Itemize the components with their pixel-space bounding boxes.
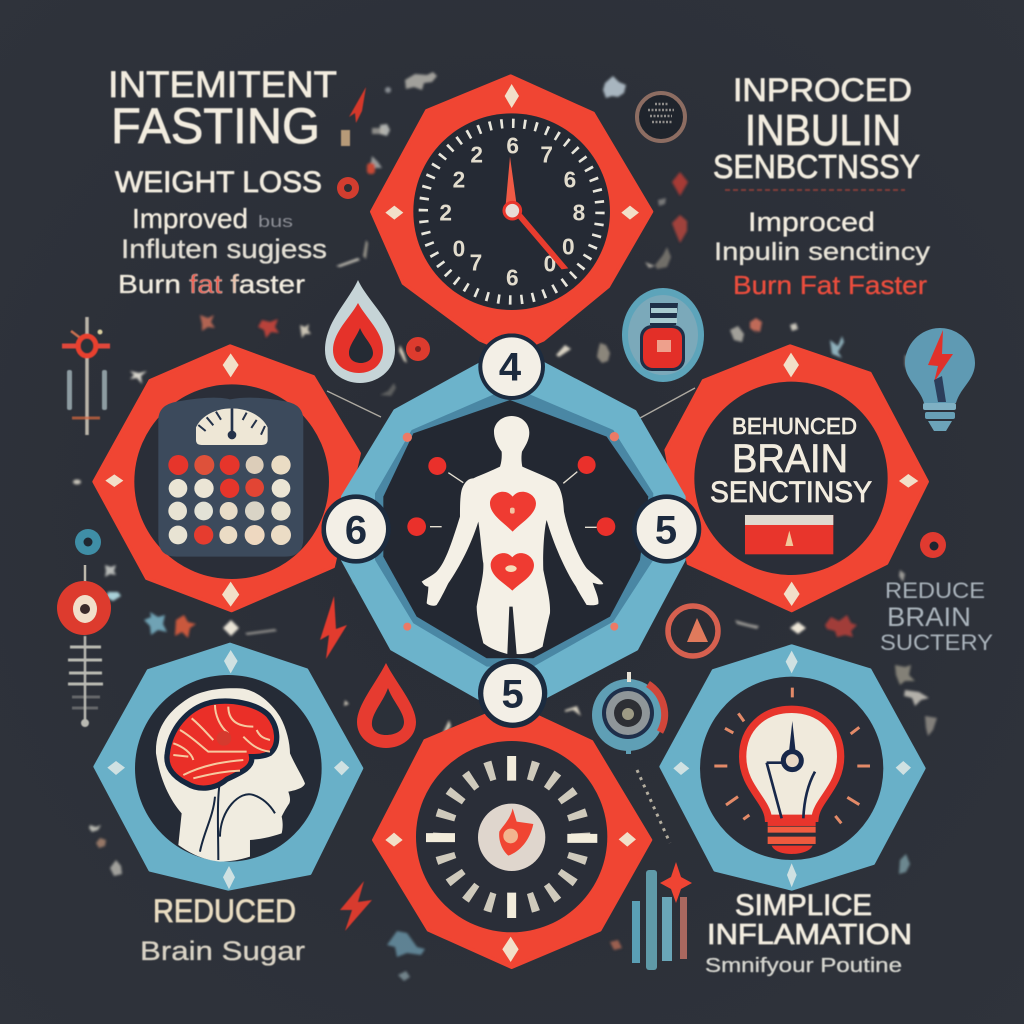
heading: brain sensitivity label: BRAIN bbox=[732, 437, 848, 481]
reduce brain text block: BRAIN bbox=[887, 602, 971, 632]
icon: horizontal scale lines bbox=[68, 636, 103, 726]
diamonds bbox=[107, 650, 349, 889]
ring inner band bbox=[375, 387, 653, 667]
heart lower bbox=[491, 553, 534, 591]
insulin sensitivity text block: INBULIN bbox=[745, 106, 901, 155]
icon: jar bbox=[622, 288, 704, 382]
decorative scattered particles bbox=[73, 72, 937, 981]
reduced brain sugar text block bbox=[140, 893, 305, 966]
badge bottom bbox=[478, 659, 547, 728]
title and weight loss text block bbox=[108, 64, 337, 299]
insulin sensitivity text block: SENBCTNSSY bbox=[713, 148, 920, 185]
heading: brain sensitivity label: SENCTINSY bbox=[710, 476, 872, 509]
title and weight loss text block: FASTING bbox=[111, 98, 320, 154]
calendar card bbox=[158, 398, 303, 557]
clock numerals: 8 bbox=[573, 200, 585, 226]
clock numerals: 2 bbox=[470, 142, 483, 168]
icon: red bolt center left bbox=[320, 596, 347, 659]
panel: clock bbox=[372, 76, 652, 353]
diamonds bbox=[385, 832, 636, 962]
brain bbox=[167, 701, 277, 788]
insulin sensitivity text block: Burn Fat Faster bbox=[733, 270, 927, 300]
body connector dots bbox=[407, 456, 615, 536]
clock numerals: 2 bbox=[453, 166, 465, 192]
title and weight loss text block: Burn fat faster bbox=[118, 269, 305, 299]
reduce brain text block: SUCTERY bbox=[880, 630, 993, 655]
clock numerals bbox=[439, 132, 585, 291]
calendar dots bbox=[168, 455, 291, 545]
clock numerals: 7 bbox=[470, 250, 482, 276]
bulb rays bbox=[714, 688, 870, 823]
badge left: 6 bbox=[345, 508, 367, 552]
title and weight loss text block: bus bbox=[258, 212, 293, 231]
icon: blood drop bbox=[325, 280, 395, 383]
clock numerals: 6 bbox=[564, 166, 576, 192]
icon: small red flower bbox=[337, 177, 359, 199]
icon: triangle ring bbox=[668, 606, 718, 656]
reduce brain text block: REDUCE bbox=[885, 578, 985, 603]
clock numerals: 6 bbox=[506, 132, 519, 158]
badge left bbox=[321, 494, 391, 564]
icon: teal ring left bbox=[75, 529, 101, 555]
title and weight loss text block: WEIGHT LOSS bbox=[115, 166, 322, 199]
simplify inflammation text block bbox=[705, 889, 912, 977]
insulin sensitivity text block bbox=[713, 72, 931, 300]
heart upper bbox=[490, 492, 536, 532]
thin connector lines bbox=[327, 388, 695, 418]
icon: gear bbox=[592, 672, 665, 754]
bulb bbox=[743, 709, 841, 854]
diamonds bbox=[105, 353, 239, 607]
clock numerals: 7 bbox=[540, 142, 553, 168]
icon: target ring top right bbox=[637, 93, 685, 141]
clock numerals: 0 bbox=[453, 235, 465, 261]
panel: light bulb bbox=[661, 646, 924, 889]
badge top bbox=[478, 333, 545, 400]
diamonds bbox=[673, 651, 911, 887]
icon: crosshair target top left bbox=[62, 317, 110, 435]
icon: large red drop bbox=[357, 663, 416, 748]
panel: weight scale calendar bbox=[94, 346, 359, 611]
scale gauge bbox=[196, 408, 268, 445]
clock hands bbox=[504, 157, 568, 269]
heading: brain sensitivity label bbox=[710, 413, 872, 509]
insulin sensitivity text block: Improced bbox=[748, 207, 875, 237]
icon: small red flower center bbox=[406, 337, 430, 361]
dial major ticks bbox=[426, 756, 597, 918]
simplify inflammation text block: SIMPLICE bbox=[735, 889, 872, 922]
badge right: 5 bbox=[655, 508, 677, 552]
icon: red bolt bottom bbox=[340, 881, 372, 931]
icon: red eye target bbox=[57, 565, 111, 635]
ring outer bbox=[343, 347, 684, 701]
icon: red ring right bbox=[920, 532, 946, 558]
reduce brain text block bbox=[880, 578, 993, 655]
heading: brain sensitivity label: BEHUNCED bbox=[732, 413, 857, 439]
dotted line bbox=[637, 770, 670, 843]
insulin sensitivity text block: INPROCED bbox=[733, 72, 912, 108]
clock numerals: 2 bbox=[439, 200, 452, 226]
reduced brain sugar text block: REDUCED bbox=[153, 893, 296, 929]
badge right bbox=[632, 494, 701, 564]
head profile bbox=[156, 688, 305, 862]
clock numerals: 0 bbox=[544, 251, 556, 277]
title and weight loss text block: Improved bbox=[132, 203, 248, 234]
title and weight loss text block: INTEMITENT bbox=[108, 64, 337, 105]
icon: light bulb with bolt bbox=[905, 328, 975, 431]
panel: reduced brain sugar bbox=[95, 644, 362, 889]
clock numerals: 0 bbox=[562, 234, 575, 260]
body silhouette bbox=[422, 416, 603, 654]
badge top: 4 bbox=[499, 346, 522, 390]
simplify inflammation text block: Smnifyour Poutine bbox=[705, 955, 902, 977]
ring center bbox=[383, 400, 648, 658]
clock numerals: 6 bbox=[506, 265, 519, 291]
neck nerves bbox=[200, 782, 275, 860]
simplify inflammation text block: INFLAMATION bbox=[707, 919, 912, 951]
dial ticks bbox=[443, 768, 581, 906]
insulin sensitivity text block: Inpulin senctincy bbox=[714, 238, 931, 266]
clock diamonds bbox=[385, 84, 639, 220]
badge bottom: 5 bbox=[502, 672, 524, 716]
icon: bar chart and star bbox=[632, 862, 692, 970]
ring red dots bbox=[403, 432, 619, 631]
dial center bbox=[478, 804, 545, 871]
panel: bottom dial bbox=[374, 704, 651, 967]
icon: small red bolt top bbox=[341, 87, 366, 146]
clock minute ticks bbox=[423, 123, 600, 300]
title and weight loss text block: Influten sugjess bbox=[121, 234, 327, 264]
reduced brain sugar text block: Brain Sugar bbox=[140, 936, 305, 966]
panel: central body ring bbox=[321, 333, 701, 728]
panel: brain sensitivity bbox=[666, 346, 927, 611]
red box bbox=[745, 515, 833, 554]
brain sensitivity diamonds bbox=[783, 353, 918, 606]
